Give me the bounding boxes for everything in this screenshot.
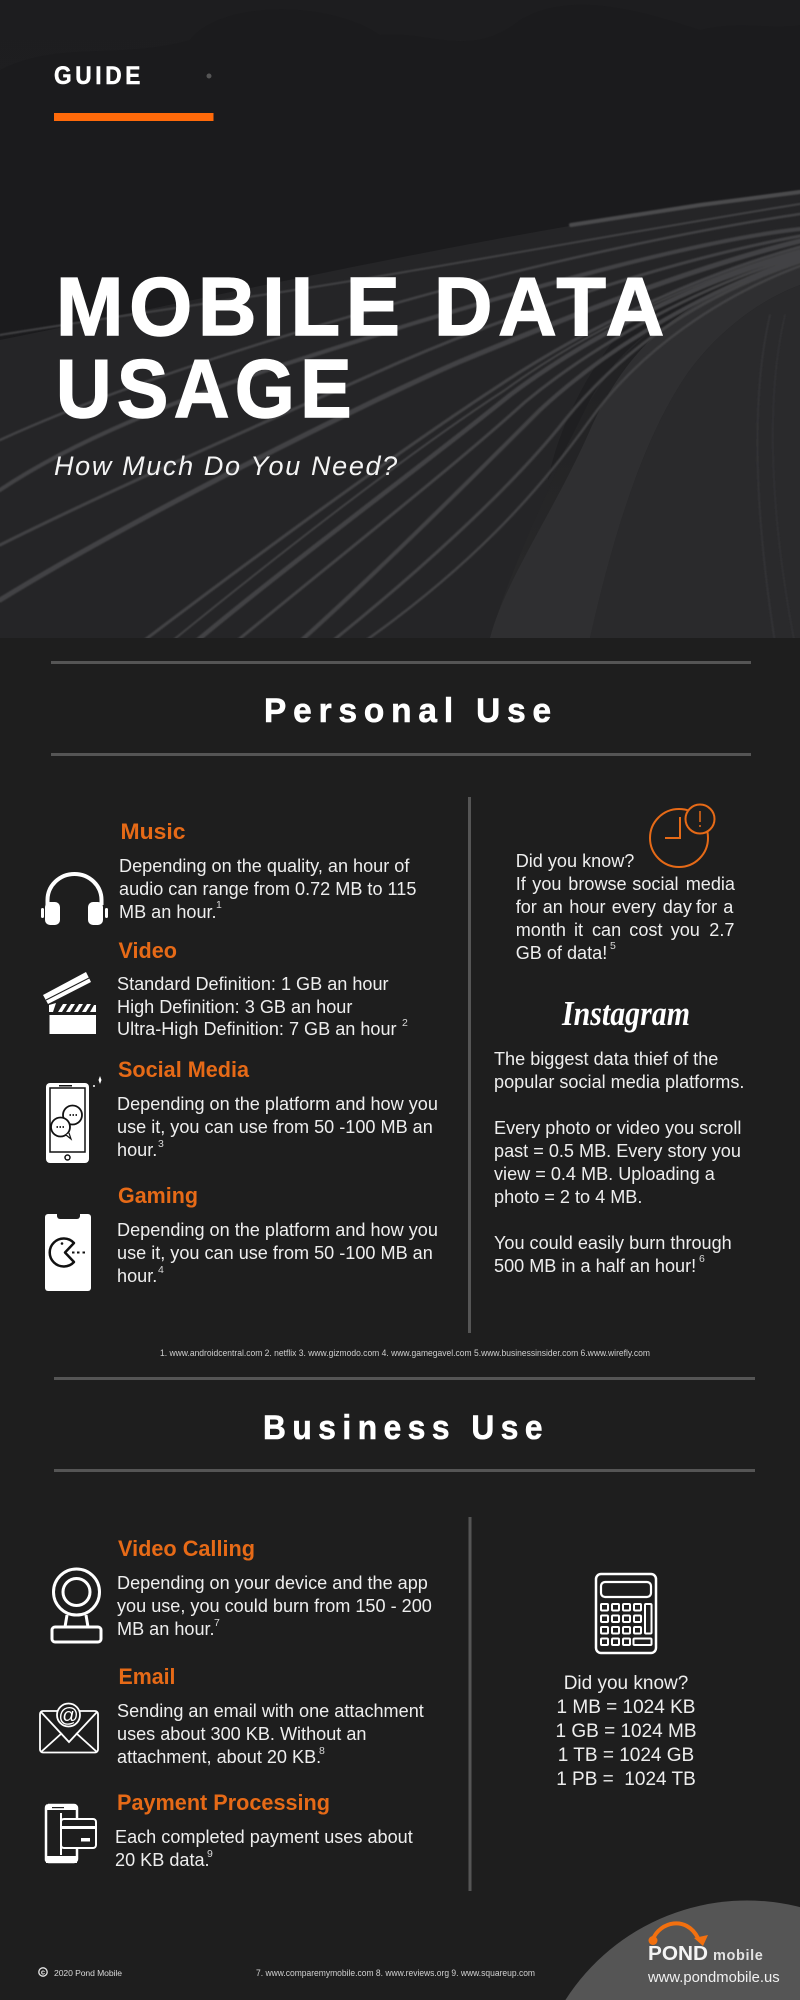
column divider: business [468,1517,472,1891]
section divider bottom: business [54,1469,755,1472]
video text [117,974,408,1039]
gaming text: hour. [117,1266,157,1286]
panel: did you know, units [556,1574,696,1790]
title: USAGE [56,342,357,435]
logo: pond mobile [647,1923,780,1986]
instagram wordmark: Instagram [561,994,690,1033]
did you know text: it [574,920,583,940]
orange accent bar [54,113,214,121]
social media text: Depending on the platform and how you [117,1094,438,1114]
guide label: GUIDE [54,62,144,90]
copyright: 2020 Pond Mobile [54,1968,122,1978]
panel: instagram [494,994,744,1276]
did you know text: a [723,897,734,917]
social media text [117,1094,438,1160]
instagram text: You could easily burn through [494,1233,732,1253]
panel: music [41,819,416,925]
icon: calculator [596,1574,656,1653]
panel: gaming [45,1183,438,1291]
video calling text: Depending on your device and the app [117,1573,428,1593]
icon: clapperboard [43,972,96,1034]
units text: 1 MB = 1024 KB [557,1697,695,1718]
heading: business use: Business Use [263,1409,549,1447]
email text [117,1701,424,1767]
music text: MB an hour. [119,902,217,922]
instagram text: view = 0.4 MB. Uploading a [494,1164,716,1184]
heading: personal use: Personal Use [264,692,558,730]
music heading: Music [120,819,186,844]
instagram text: The biggest data thief of the [494,1049,718,1069]
logo: pond mobile: mobile [713,1948,764,1964]
panel: did you know, social media [516,804,736,963]
section divider top: business [54,1377,755,1380]
payment processing text: 20 KB data. [115,1850,210,1870]
social media text: 3 [158,1138,164,1150]
instagram text: 6 [699,1253,705,1265]
panel: payment processing [46,1790,413,1870]
icon: phone and card [46,1805,96,1863]
icon: envelope with at sign: @ [58,1705,79,1727]
did you know text: browse [568,874,627,894]
video text: 2 [402,1017,408,1029]
video text: Standard Definition: 1 GB an hour [117,974,389,994]
units text: 1 GB = 1024 MB [556,1721,696,1742]
did you know text: 5 [610,940,616,952]
section divider bottom: personal [51,753,751,756]
units text: Did you know? [564,1673,688,1694]
did you know text: for [696,897,717,917]
icon: phone with pacman [45,1214,91,1291]
did you know text: month [516,920,566,940]
email text: attachment, about 20 KB. [117,1747,321,1767]
instagram text: 500 MB in a half an hour! [494,1256,696,1276]
did you know text: for [516,897,537,917]
social media heading: Social Media [118,1057,250,1082]
did you know text: cost [629,920,662,940]
footnotes: business: 7. www.comparemymobile.com 8. www.reviews.org 9. www.squareup.com [256,1968,535,1978]
did you know text: every [612,897,657,917]
icon: clock with alert [650,804,714,867]
logo arc arrow [648,1923,708,1946]
gaming heading: Gaming [118,1183,198,1208]
music text: audio can range from 0.72 MB to 115 [119,879,416,899]
logo wordmark: POND [648,1943,708,1965]
title [56,260,670,435]
units text [556,1673,696,1790]
did you know text: Did you know? [516,851,634,871]
did you know text: If [516,874,527,894]
footer corner panel [565,1900,800,2000]
instagram text [494,1049,744,1276]
section divider top: personal [51,661,751,664]
instagram text: photo = 2 to 4 MB. [494,1187,642,1207]
video text: High Definition: 3 GB an hour [117,997,352,1017]
hero photo background: highway light trails [0,74,800,638]
payment processing text: Each completed payment uses about [115,1827,413,1847]
units text: 1 TB = 1024 GB [558,1745,694,1766]
email text: 8 [319,1745,325,1757]
units text: 1 PB = 1024 TB [556,1769,696,1790]
icon: envelope with at sign [40,1704,98,1752]
social media text: hour. [117,1140,157,1160]
subtitle: How Much Do You Need? [54,451,399,481]
did you know text: social [632,874,679,894]
did you know text: an [543,897,563,917]
panel: email [40,1664,424,1767]
panel: video calling [52,1536,432,1642]
video heading: Video [118,938,177,963]
instagram text: Every photo or video you scroll [494,1118,741,1138]
email text: uses about 300 KB. Without an [117,1724,366,1744]
title: MOBILE DATA [56,260,670,353]
column divider: personal [468,797,471,1333]
copyright: c [41,1968,45,1976]
instagram text: popular social media platforms. [494,1072,744,1092]
email text: Sending an email with one attachment [117,1701,424,1721]
panel: video [43,938,408,1039]
music text: Depending on the quality, an hour of [119,856,410,876]
video calling text: you use, you could burn from 150 - 200 [117,1596,432,1616]
did you know text [516,851,736,963]
instagram text: past = 0.5 MB. Every story you [494,1141,741,1161]
gaming text: use it, you can use from 50 -100 MB an [117,1243,433,1263]
did you know text: hour [569,897,606,917]
panel: social media [46,1057,438,1163]
social media text: use it, you can use from 50 -100 MB an [117,1117,433,1137]
gaming text: Depending on the platform and how you [117,1220,438,1240]
did you know text: you [532,874,561,894]
music text [119,856,416,922]
video text: Ultra-High Definition: 7 GB an hour [117,1019,397,1039]
did you know text: 2.7 [709,920,734,940]
icon: headphones [41,874,108,925]
did you know text: can [592,920,621,940]
music text: 1 [216,899,222,911]
video calling text: 7 [214,1617,220,1629]
video calling text: MB an hour. [117,1619,215,1639]
website: www.pondmobile.us [647,1970,780,1986]
did you know text: day [663,897,693,917]
gaming text: 4 [158,1264,164,1276]
gaming text [117,1220,438,1286]
icon: phone with chat bubbles [46,1076,102,1163]
did you know text: media [686,874,736,894]
did you know text: GB of data! [516,943,607,963]
footnotes: personal: 1. www.androidcentral.com 2. netflix 3. www.gizmodo.com 4. www.gamegavel.com 5.www.businessinsider.com 6.www.wirefly.com [160,1348,650,1358]
did you know text: you [671,920,700,940]
video calling heading: Video Calling [118,1536,255,1561]
payment processing text: 9 [207,1848,213,1860]
payment processing heading: Payment Processing [117,1790,330,1815]
payment processing text [115,1827,413,1870]
video calling text [117,1573,432,1639]
icon: webcam [52,1569,101,1642]
email heading: Email [118,1664,176,1689]
